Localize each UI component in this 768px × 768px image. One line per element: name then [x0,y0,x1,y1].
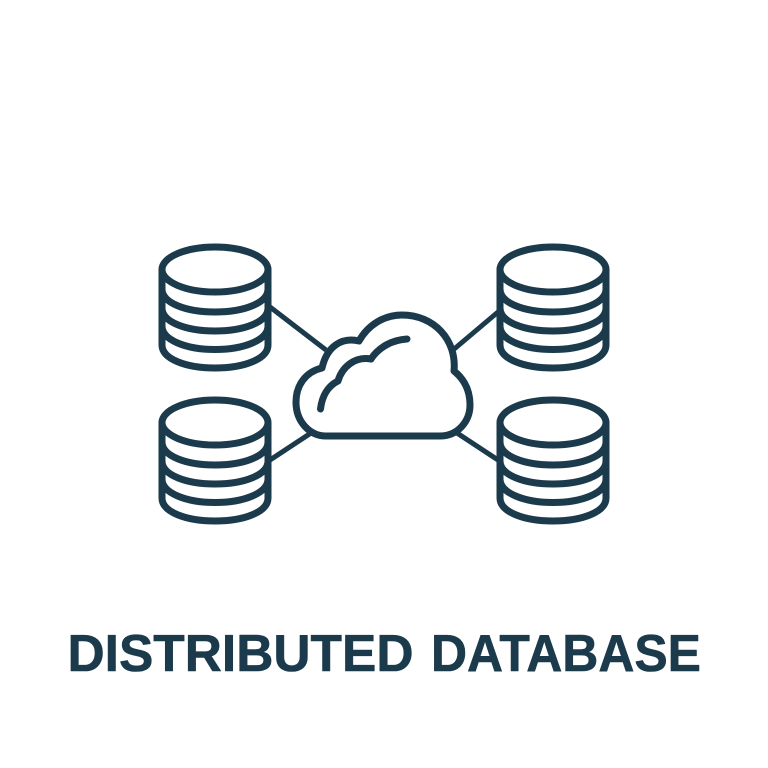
title: DISTRIBUTED [68,625,414,683]
title: DATABASE [431,625,701,683]
icon: database bottom left [162,400,268,521]
icon: database bottom right [500,400,606,521]
icon: cloud [296,315,470,436]
icon: database top left [162,247,268,368]
icon: database top right [500,247,606,368]
title [68,625,701,683]
connector lines between databases and cloud [270,307,498,460]
